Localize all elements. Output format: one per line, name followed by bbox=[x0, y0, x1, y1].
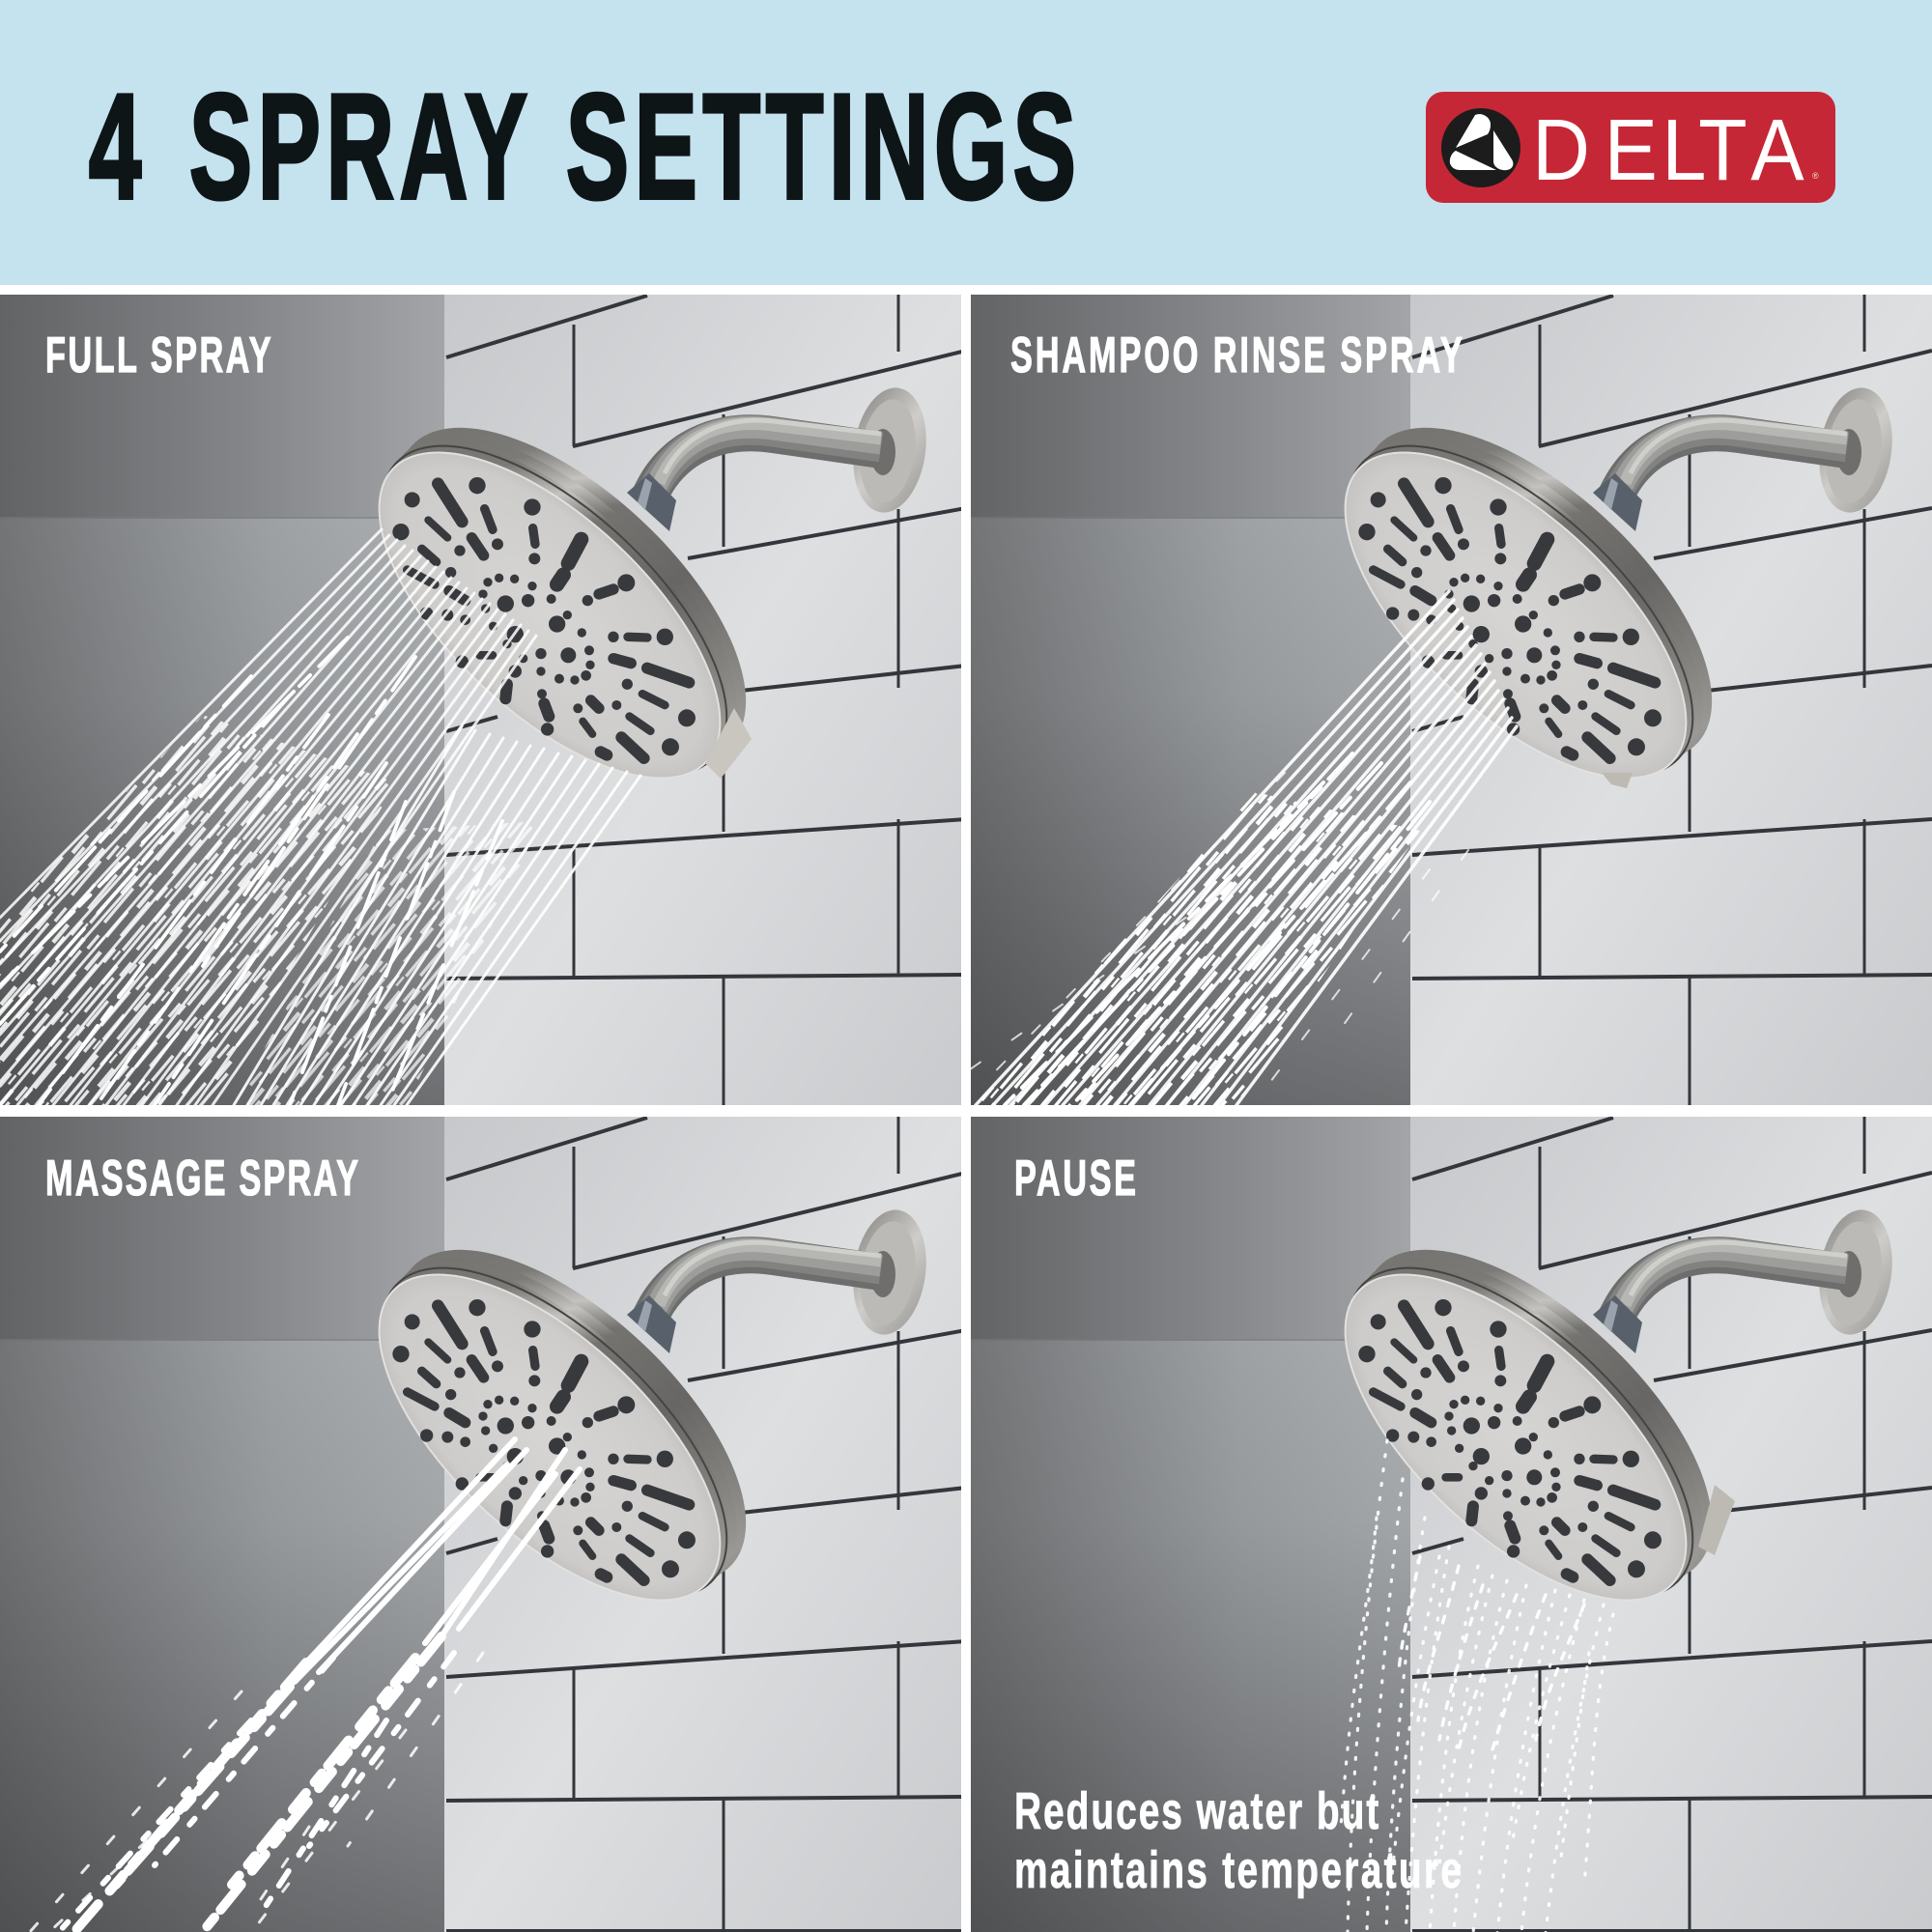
label: massage spray: MASSAGE SPRAY bbox=[45, 1151, 358, 1207]
shower lever bbox=[1698, 1485, 1735, 1555]
water: massage spray bbox=[29, 1439, 580, 1932]
shower lever bbox=[1602, 773, 1633, 788]
panel: pause bbox=[966, 1117, 1932, 1932]
logo: Delta bbox=[1426, 92, 1835, 203]
title: SPRAY bbox=[189, 64, 533, 231]
title: SETTINGS bbox=[566, 64, 1081, 231]
panel: shampoo rinse spray bbox=[966, 295, 1932, 1118]
water: shampoo rinse spray bbox=[966, 591, 1517, 1105]
panel: massage spray bbox=[0, 1117, 966, 1932]
label: shampoo rinse spray: SHAMPOO RINSE SPRAY bbox=[1010, 327, 1463, 384]
header banner bbox=[0, 0, 1932, 285]
logo: Delta: ® bbox=[1812, 171, 1819, 181]
shower lever bbox=[705, 708, 752, 779]
text: pause description: maintains temperature bbox=[1014, 1840, 1462, 1898]
label: full spray: FULL SPRAY bbox=[45, 327, 271, 384]
text: pause description: Reduces water but bbox=[1014, 1781, 1379, 1839]
water: full spray bbox=[0, 529, 640, 1105]
text: pause description bbox=[1014, 1781, 1462, 1898]
label: pause: PAUSE bbox=[1014, 1151, 1136, 1207]
water: pause droplets bbox=[1341, 1440, 1613, 1932]
panel: full spray bbox=[0, 295, 966, 1118]
title: 4 bbox=[89, 64, 147, 231]
divider between panels bbox=[961, 295, 971, 1932]
logo: Delta: DELTA bbox=[1532, 102, 1804, 199]
